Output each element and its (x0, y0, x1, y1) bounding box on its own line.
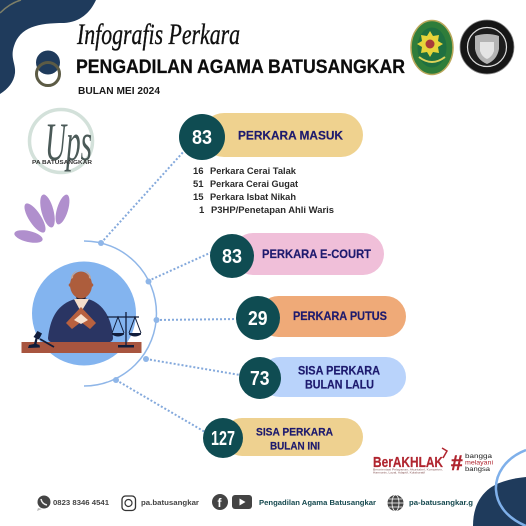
footer: facebook and youtube: f (218, 496, 222, 510)
footer: facebook and youtube: Pengadilan Agama Batusangkar (259, 498, 376, 507)
item: perkara masuk: PERKARA MASUK (238, 128, 343, 142)
item: perkara e-court (210, 233, 384, 278)
item: sisa perkara bulan lalu: BULAN LALU (305, 380, 374, 392)
subheading: BULAN MEI 2024 (78, 85, 160, 97)
logo: bangga melayani bangsa: bangga (465, 453, 492, 460)
corner shape: bottom right (473, 450, 526, 526)
item: perkara masuk (179, 113, 363, 160)
footer: phone (37, 496, 109, 511)
logo: bangga melayani bangsa: bangsa (465, 466, 490, 473)
breakdown list: Perkara Isbat Nikah (210, 192, 296, 203)
footer: phone: 0823 8346 4541 (53, 500, 109, 507)
breakdown list: 15 (193, 192, 204, 203)
logo: BerAKHLAK: Harmonis, Loyal, Adaptif, Kolaboratif (373, 472, 425, 474)
item: perkara e-court: 83 (222, 246, 242, 268)
item: perkara putus (236, 296, 406, 340)
item: sisa perkara bulan ini: SISA PERKARA (256, 426, 333, 438)
logo: BerAKHLAK: Berorientasi Pelayanan, Akuntabel, Kompeten, (373, 468, 443, 472)
item: perkara e-court: PERKARA E-COURT (262, 247, 372, 261)
emblem: Mahkamah Agung (411, 20, 453, 74)
logo: bangga melayani bangsa: melayani (465, 460, 493, 466)
breakdown list: Perkara Cerai Talak (210, 166, 297, 177)
decorative circle and ring (36, 50, 60, 86)
item: sisa perkara bulan lalu: 73 (250, 368, 270, 390)
logo: Ups: Ups (45, 112, 92, 172)
logo: Ups: PA BATUSANGKAR (32, 160, 92, 166)
breakdown list: 16 (193, 166, 204, 177)
corner shape: top left (0, 0, 96, 94)
item: sisa perkara bulan ini: 127 (211, 428, 235, 450)
breakdown list: 51 (193, 179, 204, 190)
item: perkara masuk: 83 (192, 127, 212, 149)
item: sisa perkara bulan ini: BULAN INI (270, 440, 320, 452)
item: perkara putus: 29 (248, 308, 268, 330)
breakdown list: Perkara Cerai Gugat (210, 179, 299, 190)
illustration: judge at desk (22, 262, 142, 366)
logo: BerAKHLAK: BerAKHLAK (373, 455, 443, 471)
footer: facebook and youtube (212, 494, 376, 510)
breakdown list: P3HP/Penetapan Ahli Waris (211, 205, 334, 216)
emblem: Zona Integritas (460, 20, 514, 74)
dotted connector lines (101, 150, 240, 432)
breakdown list (193, 166, 334, 216)
footer: website: pa-batusangkar.g (409, 498, 473, 507)
item: sisa perkara bulan lalu (239, 357, 406, 399)
icon: purple petals (13, 193, 72, 245)
logo: Ups (30, 110, 92, 172)
heading: PENGADILAN AGAMA BATUSANGKAR (76, 56, 405, 78)
logo: BerAKHLAK (373, 448, 447, 474)
connector arc (84, 241, 156, 386)
logo: bangga melayani bangsa (451, 452, 493, 475)
logo: bangga melayani bangsa: # (451, 452, 463, 475)
footer: instagram (122, 496, 199, 510)
footer: instagram: pa.batusangkar (141, 500, 199, 507)
item: sisa perkara bulan lalu: SISA PERKARA (298, 366, 380, 378)
item: perkara putus: PERKARA PUTUS (293, 309, 387, 323)
breakdown list: 1 (199, 205, 205, 216)
title script: Infografis Perkara (76, 18, 240, 51)
item: sisa perkara bulan ini (203, 418, 363, 458)
footer: website (388, 495, 473, 511)
connector nodes (98, 240, 160, 383)
